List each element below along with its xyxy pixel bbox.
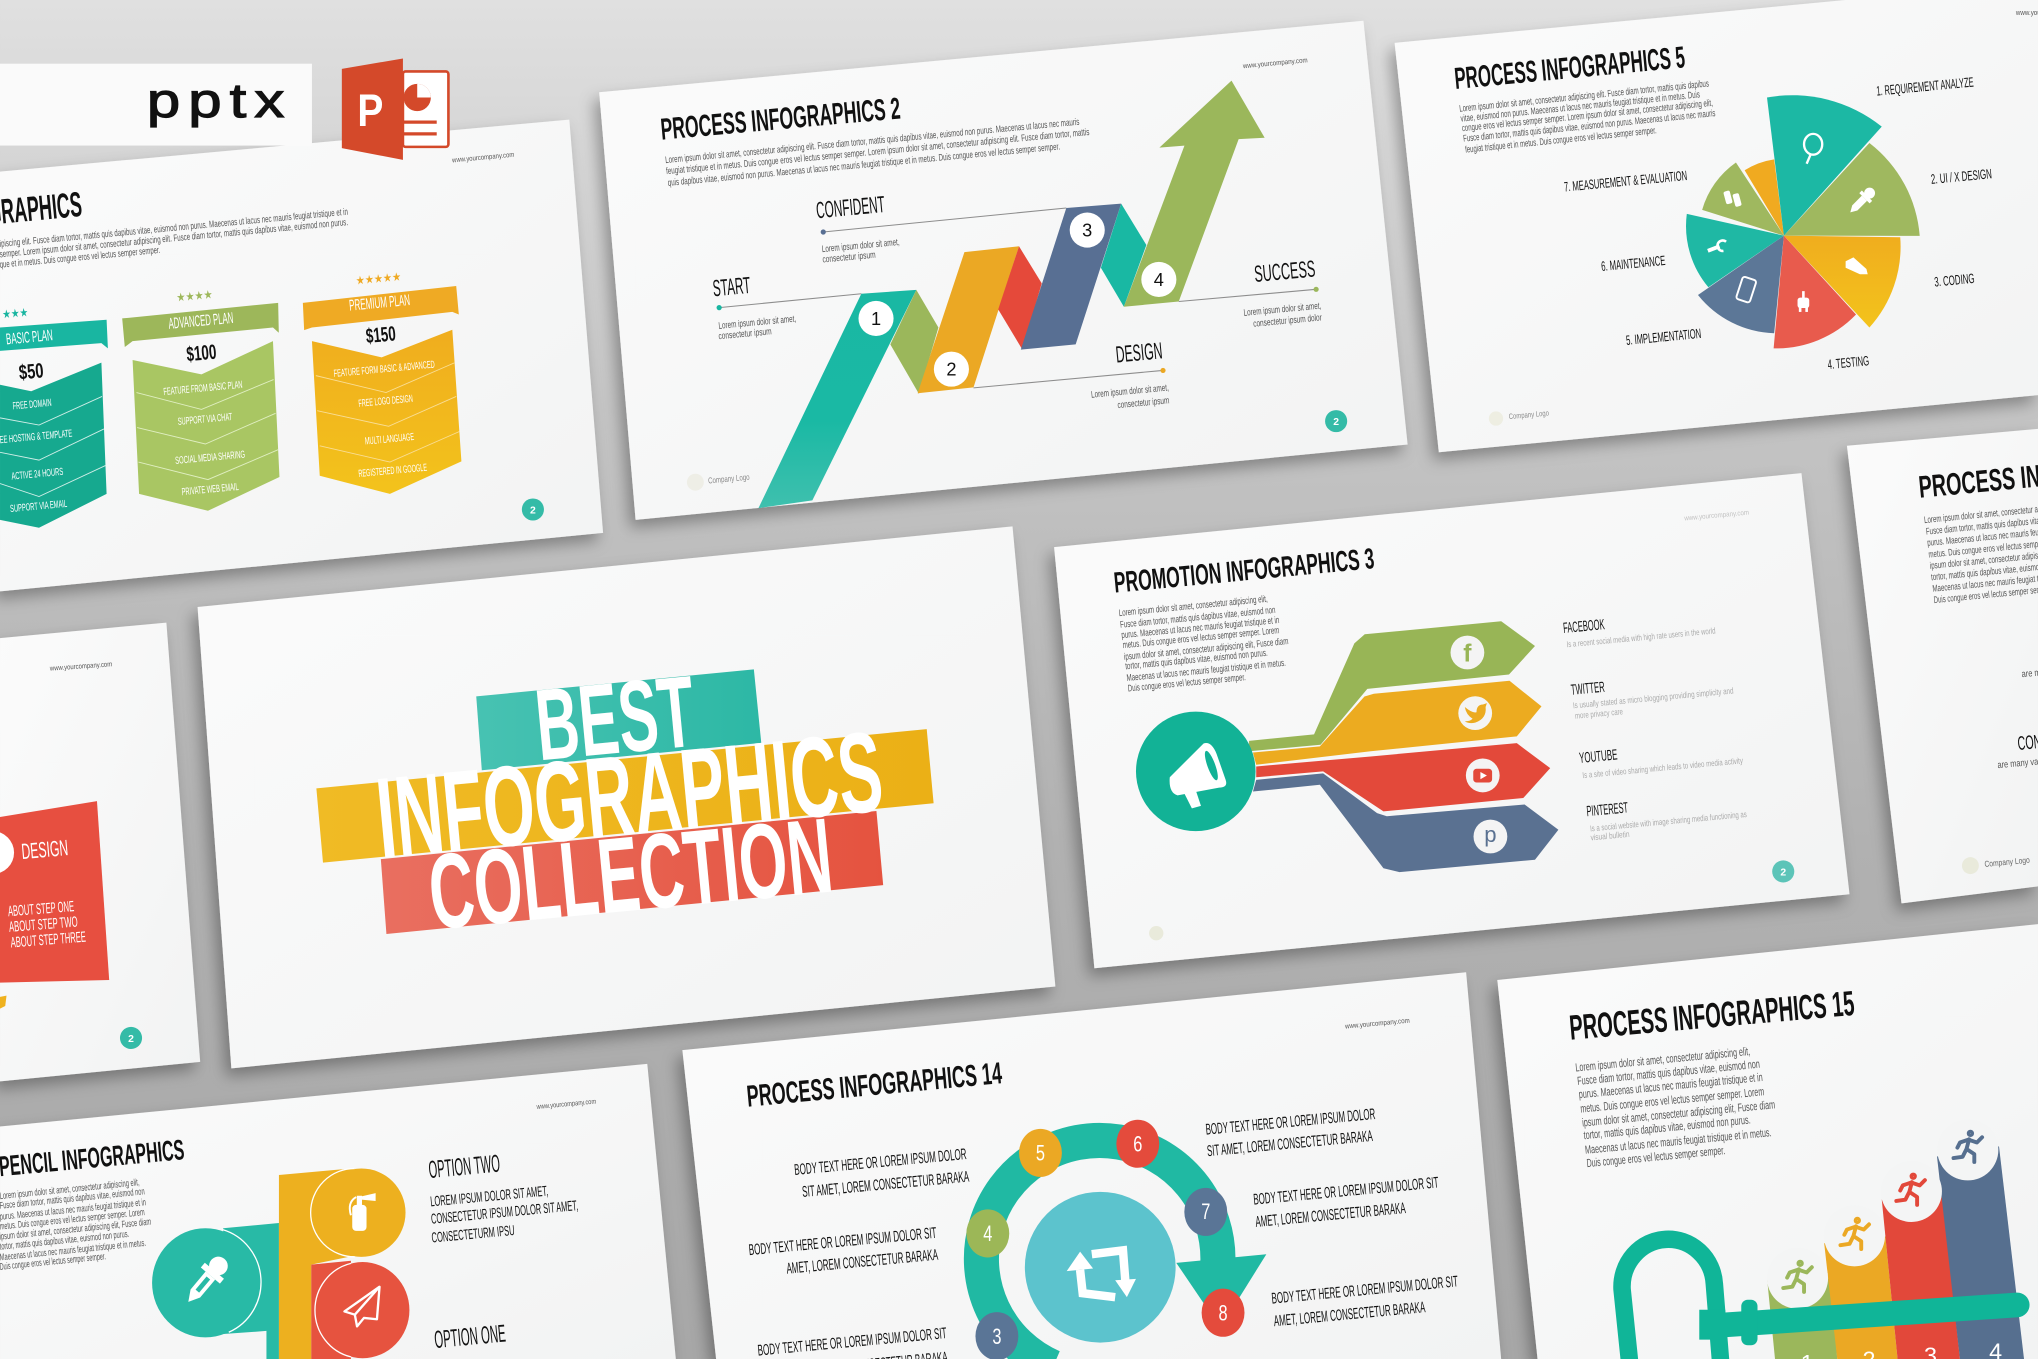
- body text: tortor, mattis quis dapibus vitae, euismod non purus.: [1125, 648, 1268, 672]
- body text: Lorem ipsum dolor sit amet, consectetur adipiscing elit,: [1575, 1045, 1751, 1074]
- body text: [1924, 501, 2038, 606]
- body text: Fusce diam tortor, mattis quis dapibus vitae, euismod non: [0, 1186, 145, 1212]
- body text: Maecenas ut lacus nec mauris feugiat tristique et in metus.: [1126, 658, 1286, 684]
- runner icons: [1783, 1132, 1982, 1292]
- center disc: [1025, 1192, 1176, 1343]
- plan: basic: ★★★: [2, 306, 29, 321]
- social labels: FACEBOOK: [1562, 616, 1605, 637]
- label: design: [1091, 337, 1170, 411]
- step captions: BODY TEXT HERE OR LOREM IPSUM DOLOR: [1205, 1106, 1376, 1139]
- plan: advanced: SOCIAL MEDIA SHARING: [175, 450, 246, 467]
- body text: Duis congue eros vel lectus semper semper.: [1586, 1144, 1726, 1170]
- label: confident: [815, 191, 900, 266]
- megaphone circle: [1136, 712, 1256, 831]
- label: confident: CONFIDENT: [815, 191, 886, 223]
- plan: premium: FEATURE FORM BASIC & ADVANCED: [333, 360, 435, 380]
- icon: wrench: [1708, 241, 1726, 251]
- page badge: [522, 498, 544, 521]
- url: www.yourcompany.com: [1242, 56, 1308, 70]
- slide: pencil infographics: [0, 1064, 676, 1359]
- plan: advanced: SUPPORT VIA CHAT: [177, 412, 233, 428]
- bar columns: [1767, 1146, 2024, 1359]
- pie chart: [1686, 95, 1920, 348]
- heading: PROCESS INFOGRAPHICS 5: [1453, 40, 1686, 96]
- label: success: Lorem ipsum dolor sit amet,: [1243, 301, 1322, 319]
- option two: CONSECTETURM IPSU: [431, 1223, 515, 1247]
- step captions: BODY TEXT HERE OR LOREM IPSUM DOLOR SIT: [748, 1225, 938, 1259]
- icon: youtube: [1466, 759, 1500, 792]
- circle: yellow extinguisher: [311, 1168, 406, 1257]
- label: design: consectetur ipsum: [1117, 395, 1170, 411]
- heading: PROCESS INFOGRAPHICS 14: [745, 1056, 1003, 1114]
- social labels: Is a social website with image sharing media functioning as: [1590, 809, 1747, 833]
- body text: [1575, 1045, 1776, 1170]
- slide: process infographics 2: [599, 21, 1408, 520]
- body text: tortor, mattis quis dapibus vitae, euismod non purus.: [1583, 1113, 1751, 1142]
- step captions: BODY TEXT HERE OR LOREM IPSUM DOLOR SIT: [1271, 1273, 1459, 1308]
- slide: design fragment: [0, 623, 200, 1081]
- body text: congue eros vel lectus semper semper. Lorem ipsum dolor sit amet, consectetur adipiscing elit,: [1461, 98, 1713, 134]
- body text: tortor, mattis quis dapibus vitae, euismod non purus.: [0, 1229, 130, 1253]
- body text: [0, 207, 348, 271]
- step markers: 2: [946, 360, 956, 380]
- icon: pinterest: [1474, 820, 1507, 853]
- step captions: SIT AMET, LOREM CONSECTETUR BARAKA: [1206, 1128, 1374, 1160]
- icon: binoculars: [1723, 190, 1742, 207]
- plan: premium: $150: [365, 322, 397, 348]
- body text: [0, 1177, 152, 1273]
- url: www.yourcompany.com: [1683, 509, 1749, 523]
- slide sheet: [1395, 0, 2038, 452]
- plan: advanced: FEATURE FROM BASIC PLAN: [163, 380, 243, 398]
- ribbons: [1249, 621, 1558, 872]
- body text: Lorem ipsum dolor sit amet, consectetur adipiscing elit. Fusce diam tortor, mattis quis dapibus: [1459, 78, 1710, 115]
- social labels: visual bulletin: [1590, 829, 1630, 842]
- body text: metus. Duis congue eros vel lectus semper semper. Lorem: [0, 1207, 145, 1233]
- body text: feugiat tristique et in metus. Duis congue eros vel lectus semper semper. Lorem ipsum dolor sit amet, consectetur adipiscing elit. Fusce diam tortor, mattis: [666, 127, 1090, 177]
- step captions: AMET, LOREM CONSECTETUR BARAKA: [786, 1247, 939, 1278]
- title text: best: BEST: [531, 655, 699, 782]
- label: confident: Lorem ipsum dolor sit amet,: [821, 237, 900, 255]
- slide: process infographics 15: [1497, 924, 2038, 1359]
- icon: magnifier: [1804, 134, 1822, 164]
- url: www.yourcompany.com: [49, 660, 112, 673]
- icon: pinterest: p: [1484, 822, 1497, 847]
- pie labels: 4. TESTING: [1827, 353, 1870, 372]
- slide: title: [198, 526, 1055, 1068]
- step captions: SIT AMET, LOREM CONSECTETUR BARAKA: [801, 1169, 970, 1201]
- social labels: Is a recent social media with high rate users in the world: [1566, 625, 1716, 649]
- body text: purus. Maecenas ut lacus nec mauris feugiat tristique et in: [1578, 1071, 1763, 1101]
- step markers: [858, 213, 1176, 387]
- body text: Maecenas ut lacus nec mauris feugiat tristique et in metus.: [1584, 1126, 1772, 1157]
- label: design: DESIGN: [1115, 337, 1164, 368]
- label: start: START: [712, 272, 752, 301]
- page badge: [1772, 860, 1794, 883]
- teal bar: [476, 669, 761, 770]
- body text: Lorem ipsum dolor sit amet, consectetur adipiscing elit,: [1118, 594, 1268, 619]
- icon: phone: [1736, 276, 1757, 303]
- icon: twitter: [1458, 696, 1492, 730]
- body text: Lorem ipsum dolor sit amet, consectetur adipiscing elit,: [0, 1177, 140, 1202]
- circular arrow: [981, 1140, 1266, 1359]
- pie labels: 7. MEASUREMENT & EVALUATION: [1563, 168, 1688, 195]
- runner circles: [1767, 1119, 1998, 1309]
- circle: red paper plane: [315, 1262, 409, 1358]
- label: success: SUCCESS: [1253, 255, 1316, 287]
- slide: process infographics 14: [682, 972, 1501, 1359]
- url: www.yourcompany.com: [535, 1098, 597, 1111]
- body text: Lorem ipsum dolor sit amet, consectetur adipiscing elit. Fusce diam tortor, mattis quis dapibus vitae, euismod non purus. Maecenas ut lacus nec mauris: [665, 117, 1080, 166]
- plan: advanced: [122, 288, 279, 511]
- panel list: ABOUT STEP ONE: [7, 898, 75, 920]
- page badge: 2: [1333, 417, 1339, 428]
- title text: collection: COLLECTION: [424, 796, 837, 952]
- option two: [428, 1151, 579, 1247]
- slide sheet: [0, 1064, 676, 1359]
- plan: advanced: PRIVATE WEB EMAIL: [181, 482, 239, 498]
- option two: OPTION TWO: [428, 1151, 501, 1184]
- body text: Fusce diam tortor, mattis quis dapibus vitae, euismod non: [1577, 1058, 1760, 1088]
- company logo: Company Logo: [1508, 408, 1549, 421]
- pie labels: 3. CODING: [1934, 271, 1975, 290]
- option text fragments: [1997, 664, 2038, 771]
- label: success: [1243, 255, 1323, 330]
- plan: basic: [0, 306, 108, 528]
- step captions: AMET, LOREM CONSECTETUR BARAKA: [1255, 1200, 1407, 1231]
- red design panel: [0, 801, 109, 983]
- url: www.yourcompany.com: [1344, 1017, 1410, 1031]
- body text: Duis congue eros vel lectus semper semper.: [1127, 672, 1246, 694]
- plan: advanced: ADVANCED PLAN: [168, 310, 234, 333]
- plan: basic: ACTIVE 24 HOURS: [11, 467, 64, 483]
- body text: ipsum dolor sit amet, consectetur adipiscing elit, Fusce diam: [0, 1217, 152, 1243]
- panel list: ABOUT STEP THREE: [10, 929, 87, 951]
- step captions: [748, 1106, 1459, 1359]
- step captions: BODY TEXT HERE OR LOREM IPSUM DOLOR SIT: [1253, 1174, 1440, 1209]
- title text: infographics: INFOGRAPHICS: [371, 708, 888, 883]
- plan: basic: BASIC PLAN: [5, 327, 53, 348]
- icon: dropper: [1845, 184, 1879, 218]
- slide: process fragment right: [1847, 429, 2038, 903]
- slide sheet: [0, 120, 603, 591]
- plan: premium: PREMIUM PLAN: [348, 292, 411, 315]
- step markers: 8: [1219, 1301, 1228, 1326]
- step markers: [966, 1120, 1245, 1359]
- icon: powerpoint: [342, 58, 448, 160]
- body text: purus. Maecenas ut lacus nec mauris feugiat tristique et in: [0, 1197, 146, 1223]
- plan: premium: FREE LOGO DESIGN: [358, 394, 413, 410]
- page badge: 2: [530, 505, 536, 516]
- column numbers: [1801, 1339, 2002, 1359]
- company logo: [1489, 408, 1549, 426]
- plan: basic: FREE DOMAIN: [12, 398, 52, 412]
- slide sheet: [1054, 473, 1850, 968]
- body text: Duis congue eros vel lectus semper semper.: [0, 1251, 106, 1273]
- icon: plug: [1798, 291, 1809, 312]
- option two: LOREM IPSUM DOLOR SIT AMET,: [430, 1184, 549, 1210]
- panel list: [7, 898, 87, 951]
- step markers: 4: [983, 1221, 992, 1246]
- icon: facebook: f: [1463, 641, 1472, 668]
- body text: Maecenas ut lacus nec mauris feugiat tristique et in metus.: [0, 1238, 146, 1263]
- plan: premium: [303, 270, 461, 494]
- company logo: [687, 472, 750, 491]
- slide sheet: [682, 972, 1501, 1359]
- url: www.yourcompany.com: [451, 151, 515, 165]
- social labels: YOUTUBE: [1578, 746, 1618, 767]
- body text: purus. Maecenas ut lacus nec mauris feugiat tristique et in: [1121, 615, 1280, 641]
- slide sheet: [1497, 924, 2038, 1359]
- pie labels: 6. MAINTENANCE: [1601, 253, 1666, 274]
- icon: powerpoint: P: [357, 85, 383, 136]
- body text: semper. Lorem ipsum dolor sit amet, consectetur adipiscing elit. Fusce diam tortor, mattis quis dapibus vitae, euismod non purus.: [0, 217, 348, 260]
- company logo: Company Logo: [708, 472, 750, 485]
- plan: premium: REGISTERED IN GOOGLE: [358, 463, 428, 480]
- body text: quis dapibus vitae, euismod non purus. Maecenas ut lacus nec mauris feugiat tristique et in metus. Duis congue eros vel lectus semper semper.: [667, 142, 1060, 189]
- body text: [1459, 78, 1716, 156]
- red bar: [381, 811, 883, 934]
- body text: Fusce diam tortor, mattis quis dapibus vitae, euismod non purus. Maecenas ut lacus nec mauris: [1463, 108, 1716, 145]
- option two: CONSECTETUR IPSUM DOLOR SIT AMET,: [430, 1198, 579, 1228]
- body text: vitae, euismod non purus. Maecenas ut lacus nec mauris feugiat tristique et in metus. Duis: [1460, 89, 1701, 125]
- step markers: 3: [1082, 221, 1092, 241]
- body text: metus. Duis congue eros vel lectus semper semper. Lorem: [1122, 625, 1280, 651]
- plan: basic: SUPPORT VIA EMAIL: [10, 499, 68, 515]
- page badge: 2: [128, 1034, 134, 1045]
- panel heading: DESIGN: [20, 835, 69, 864]
- social labels: Is usually stated as micro blogging providing simplicity and: [1572, 685, 1734, 710]
- social labels: Is a site of video sharing which leads to video media activity: [1582, 755, 1744, 780]
- step markers: 7: [1201, 1199, 1210, 1224]
- label: start: [712, 272, 797, 342]
- label: design: Lorem ipsum dolor sit amet,: [1091, 383, 1169, 401]
- label: start: consectetur ipsum: [718, 326, 772, 342]
- social labels: PINTEREST: [1586, 799, 1629, 820]
- step markers: 3: [992, 1324, 1001, 1349]
- page badge: [120, 1027, 142, 1049]
- body text: [1118, 594, 1289, 694]
- step markers: 6: [1133, 1132, 1142, 1157]
- slide sheet: [0, 623, 200, 1081]
- step markers: 1: [871, 309, 881, 329]
- label: success: consectetur ipsum dolor: [1253, 312, 1323, 330]
- company logo: [1149, 926, 1163, 940]
- slide: promotion infographics 3: [1054, 473, 1850, 968]
- step captions: BODY TEXT HERE OR LOREM IPSUM DOLOR SIT: [757, 1325, 948, 1359]
- pptx label: [0, 64, 312, 146]
- body text: que et in metus. Duis congue eros vel lectus semper semper.: [0, 245, 161, 271]
- body text: metus. Duis congue eros vel lectus semper semper. Lorem: [1580, 1085, 1765, 1116]
- page badge: [1325, 410, 1347, 432]
- circle: teal dropper: [152, 1228, 261, 1337]
- plan: advanced: $100: [186, 341, 217, 366]
- plan: advanced: ★★★★: [176, 288, 213, 305]
- pptx label: pptx: [147, 74, 292, 128]
- key graphic: [1622, 1239, 2017, 1359]
- social labels: more privacy care: [1575, 706, 1624, 721]
- pie labels: 5. IMPLEMENTATION: [1625, 326, 1702, 348]
- body text: [665, 117, 1090, 189]
- plan: premium: MULTI LANGUAGE: [364, 432, 415, 447]
- icon: repeat arrows: [1067, 1250, 1136, 1297]
- heading: PENCIL INFOGRAPHICS: [0, 1134, 186, 1183]
- social labels: TWITTER: [1570, 679, 1606, 699]
- step markers: 4: [1154, 270, 1164, 290]
- company logo: [1962, 855, 2030, 874]
- step captions: AMET, LOREM CONSECTETUR BARAKA: [1273, 1299, 1426, 1330]
- slide: pricing plans: [0, 120, 603, 591]
- page badge: 2: [1780, 867, 1786, 878]
- pie labels: [1563, 75, 1993, 372]
- body text: feugiat tristique et in metus. Duis congue eros vel lectus semper semper.: [1465, 125, 1657, 156]
- plan: basic: $50: [18, 359, 45, 385]
- body text: Fusce diam tortor, mattis quis dapibus vitae, euismod non: [1120, 605, 1276, 631]
- plan: basic: EE HOSTING & TEMPLATE: [0, 429, 73, 446]
- pie labels: 2. UI / X DESIGN: [1930, 166, 1993, 187]
- label: confident: consectetur ipsum: [822, 250, 876, 266]
- slide sheet: [1847, 429, 2038, 903]
- white circle: [0, 831, 14, 874]
- panel list: ABOUT STEP TWO: [8, 914, 78, 936]
- pencil graphic: [152, 1168, 409, 1359]
- heading: PROCESS INFOGRAPHICS 2: [659, 91, 902, 147]
- slide sheet: [599, 21, 1408, 520]
- social labels: [1562, 616, 1747, 842]
- label: start: Lorem ipsum dolor sit amet,: [718, 314, 797, 332]
- icon: facebook: [1451, 636, 1484, 669]
- slide: process infographics 5: [1395, 0, 2038, 452]
- yellow marker: [0, 996, 7, 1009]
- body text: ipsum dolor sit amet, consectetur adipiscing elit, Fusce diam: [1582, 1098, 1776, 1129]
- leader lines: [717, 208, 1319, 388]
- body text: ipiscing elit. Fusce diam tortor, mattis quis dapibus vitae, euismod non purus. Maecenas ut lacus nec mauris feugiat tristique et in: [0, 207, 348, 250]
- plan: premium: ★★★★★: [355, 270, 402, 288]
- step markers: 5: [1036, 1141, 1045, 1166]
- zigzag arrow ribbon: [758, 81, 1265, 508]
- heading: PROMOTION INFOGRAPHICS 3: [1113, 543, 1376, 600]
- slide sheet: [198, 526, 1055, 1068]
- step captions: BODY TEXT HERE OR LOREM IPSUM DOLOR: [794, 1146, 967, 1179]
- body text: ipsum dolor sit amet, consectetur adipiscing elit, Fusce diam: [1124, 636, 1289, 663]
- yellow bar: [316, 729, 934, 863]
- icon: pencil: [1846, 257, 1868, 274]
- slide: pencil infographics: OPTION ONE: [433, 1321, 507, 1354]
